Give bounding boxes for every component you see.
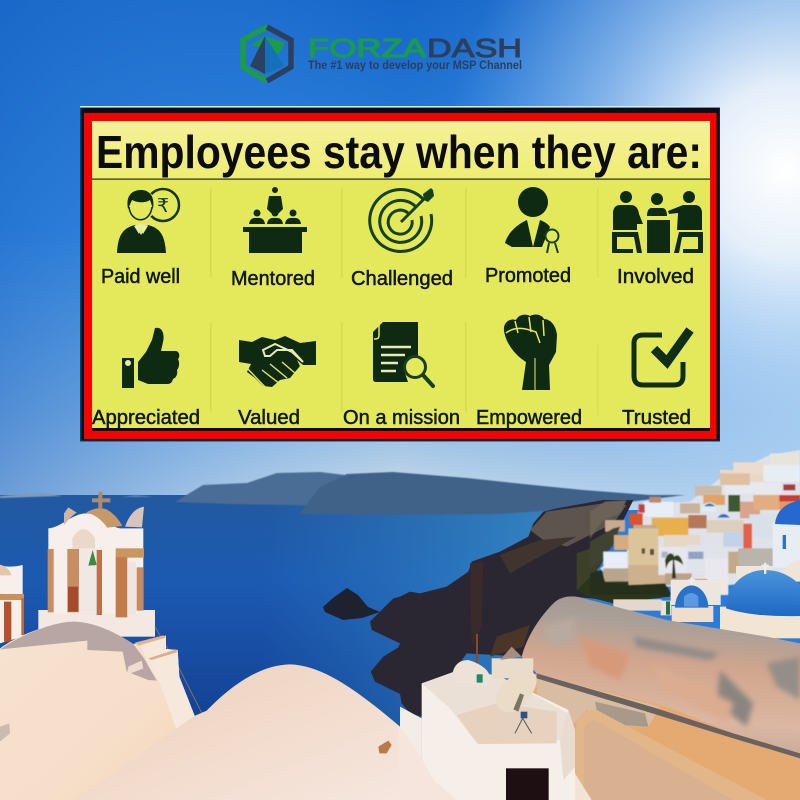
logo wordmark: DASH: [427, 33, 522, 63]
label: promoted: Promoted: [485, 265, 571, 287]
cliff: [370, 500, 670, 717]
green bell: [88, 550, 97, 566]
icon: challenged target: [370, 188, 434, 252]
icon: trusted checkbox: [634, 330, 690, 385]
logo wordmark: [308, 33, 522, 63]
icon: involved: [612, 191, 703, 253]
ledge under barrel: [537, 673, 660, 730]
rope: [155, 627, 202, 713]
logo tagline: The #1 way to develop your MSP Channel: [308, 58, 522, 72]
icon: valued handshake: [239, 336, 316, 388]
small blue dome: [671, 577, 721, 622]
icon: paid well: ₹: [157, 195, 169, 217]
bottom dome continuation: [398, 707, 457, 800]
sea: [0, 495, 580, 735]
sea rocks: [323, 588, 380, 620]
blue domed churches: [613, 500, 800, 638]
icon: promoted: [505, 187, 558, 253]
label: empowered: Empowered: [476, 407, 582, 429]
sky background: [0, 0, 800, 510]
left chapel dome: [0, 622, 195, 800]
roofs foreground right: [422, 596, 800, 800]
large blue dome: [720, 563, 800, 638]
label: involved: Involved: [617, 266, 694, 288]
label: mentored: Mentored: [231, 268, 315, 290]
label: trusted: Trusted: [622, 407, 691, 429]
bottom dome: [75, 664, 400, 800]
heading: Employees stay when they are:: [96, 126, 702, 178]
label: paid well: Paid well: [101, 266, 180, 288]
top right dome: [773, 500, 800, 582]
small left tower: [0, 565, 24, 643]
main bell tower: [38, 492, 155, 637]
barrel roof: [522, 596, 800, 758]
icon: appreciated thumbs up: [122, 328, 179, 388]
left bell tower and chapel: [0, 492, 400, 800]
label: valued: Valued: [238, 407, 300, 429]
door: [506, 768, 549, 800]
icon: paid well: [117, 189, 179, 253]
panel: employees stay: [80, 106, 720, 442]
white building: [422, 647, 575, 800]
label: on a mission: On a mission: [343, 407, 460, 429]
icon: empowered fist: [504, 315, 557, 390]
icon: mentored: [243, 187, 307, 253]
logo wordmark: FORZA: [308, 33, 427, 63]
town on hillside: [590, 450, 800, 595]
icon: on a mission document: [373, 322, 433, 386]
backing fill: [422, 673, 800, 800]
logo: [243, 27, 522, 81]
label: challenged: Challenged: [351, 268, 453, 290]
logo hexagon icon: [243, 27, 291, 81]
satellite dish: [496, 672, 537, 733]
curved terrace: [575, 710, 767, 800]
distant hills: [0, 472, 685, 515]
label: appreciated: Appreciated: [92, 407, 200, 429]
